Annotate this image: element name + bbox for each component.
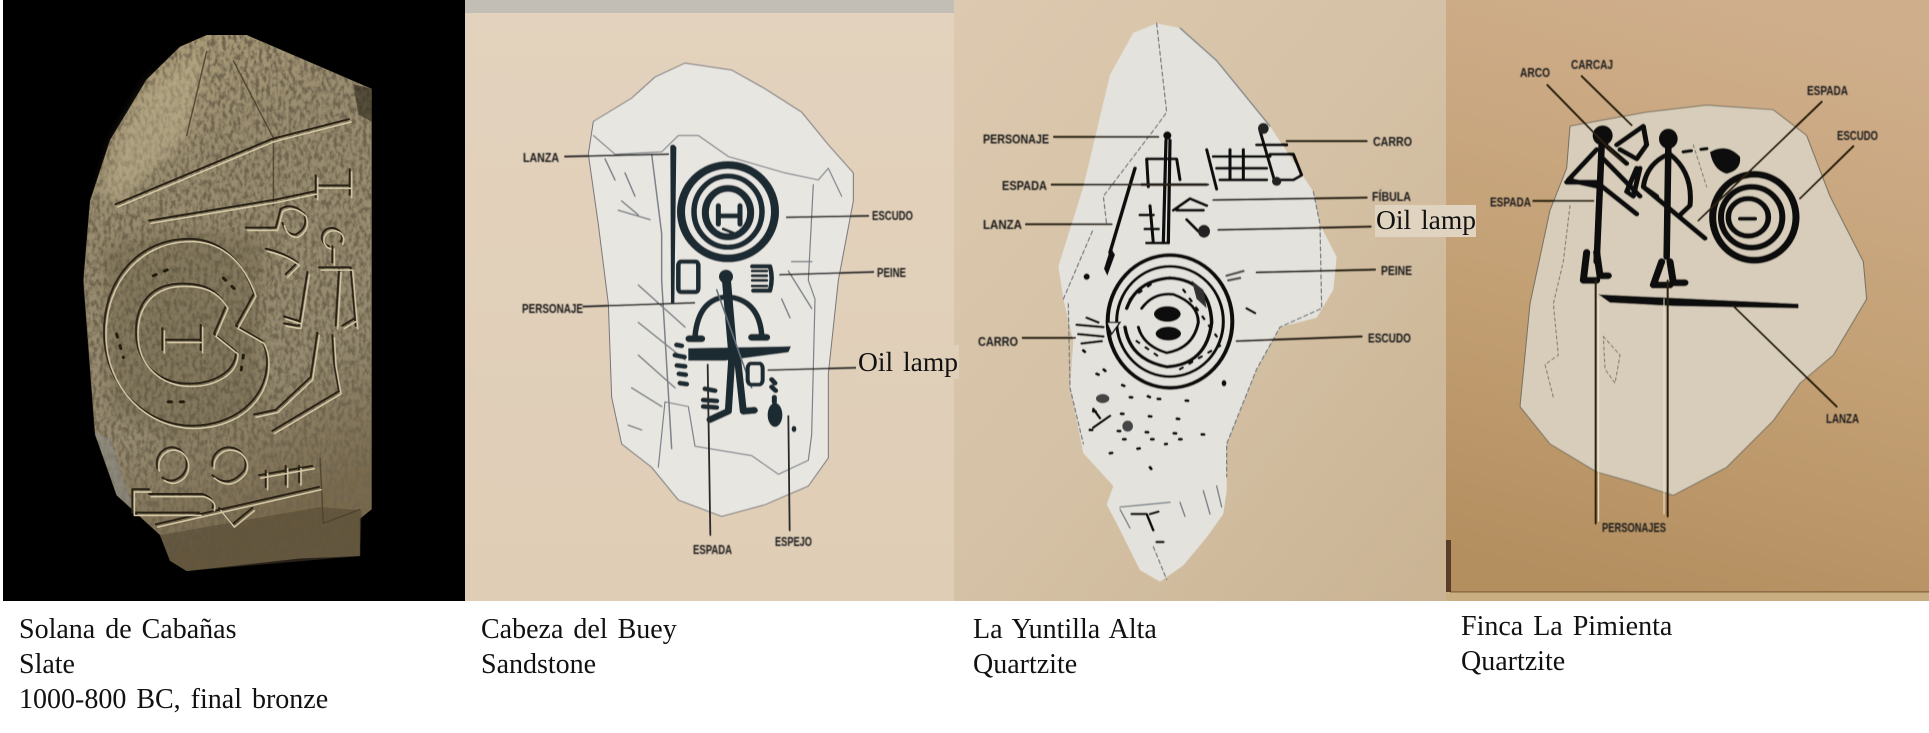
- panel: La Yuntilla Alta drawing: [954, 0, 1446, 601]
- labels: Finca La Pimienta: PERSONAJES: [1602, 520, 1666, 535]
- labels: La Yuntilla Alta: [978, 132, 1412, 349]
- label: Oil lamp on La Yuntilla Alta: Oil lamp: [1376, 204, 1476, 235]
- panel: Finca La Pimienta drawing: [1446, 0, 1929, 601]
- panel: Solana de Cabañas photo: [3, 0, 465, 601]
- stone slab with engravings: [83, 35, 372, 571]
- labels: La Yuntilla Alta: LANZA: [983, 217, 1023, 232]
- caption: Finca La Pimienta: Quartzite: [1461, 646, 1565, 677]
- labels: Cabeza del Buey: ESPADA: [693, 542, 732, 557]
- panel: Cabeza del Buey drawing: [465, 0, 955, 601]
- caption: Cabeza del Buey: Sandstone: [481, 649, 596, 680]
- labels: Finca La Pimienta: ESPADA: [1807, 83, 1848, 98]
- labels: Finca La Pimienta: ARCO: [1520, 65, 1550, 80]
- labels: Cabeza del Buey: PERSONAJE: [522, 301, 583, 316]
- caption: Finca La Pimienta: Finca La Pimienta: [1461, 611, 1672, 642]
- caption: Solana de Cabañas: Slate: [19, 649, 75, 680]
- labels: La Yuntilla Alta: ESCUDO: [1368, 330, 1411, 346]
- labels: Finca La Pimienta: ESCUDO: [1837, 128, 1878, 143]
- labels: Finca La Pimienta: CARCAJ: [1571, 57, 1613, 72]
- slab outline and figures: [1023, 23, 1375, 582]
- labels: Cabeza del Buey: PEINE: [877, 265, 906, 280]
- caption: Cabeza del Buey: Cabeza del Buey: [481, 614, 677, 645]
- labels: La Yuntilla Alta: CARRO: [1373, 134, 1412, 149]
- slab outline and figures: [1520, 76, 1867, 523]
- labels: Finca La Pimienta: ESPADA: [1490, 194, 1531, 210]
- caption: La Yuntilla Alta: Quartzite: [973, 649, 1077, 680]
- labels: La Yuntilla Alta: FÍBULA: [1372, 189, 1411, 204]
- labels: Cabeza del Buey: ESPEJO: [775, 534, 812, 549]
- labels: Cabeza del Buey: LANZA: [523, 150, 559, 165]
- labels: Finca La Pimienta: LANZA: [1826, 411, 1859, 426]
- labels: Finca La Pimienta: [1490, 57, 1878, 535]
- labels: La Yuntilla Alta: PERSONAJE: [983, 132, 1049, 146]
- caption: La Yuntilla Alta: La Yuntilla Alta: [973, 614, 1157, 645]
- caption: Solana de Cabañas: 1000-800 BC, final bronze: [19, 684, 328, 715]
- labels: La Yuntilla Alta: PEINE: [1381, 263, 1412, 278]
- labels: La Yuntilla Alta: CARRO: [978, 334, 1018, 349]
- label: Oil lamp on Cabeza del Buey: Oil lamp: [858, 346, 958, 377]
- caption: Solana de Cabañas: Solana de Cabañas: [19, 614, 236, 645]
- labels: Cabeza del Buey: [522, 150, 913, 557]
- slab outline and figures: [565, 63, 873, 535]
- labels: Cabeza del Buey: ESCUDO: [872, 208, 913, 223]
- labels: La Yuntilla Alta: ESPADA: [1002, 178, 1048, 193]
